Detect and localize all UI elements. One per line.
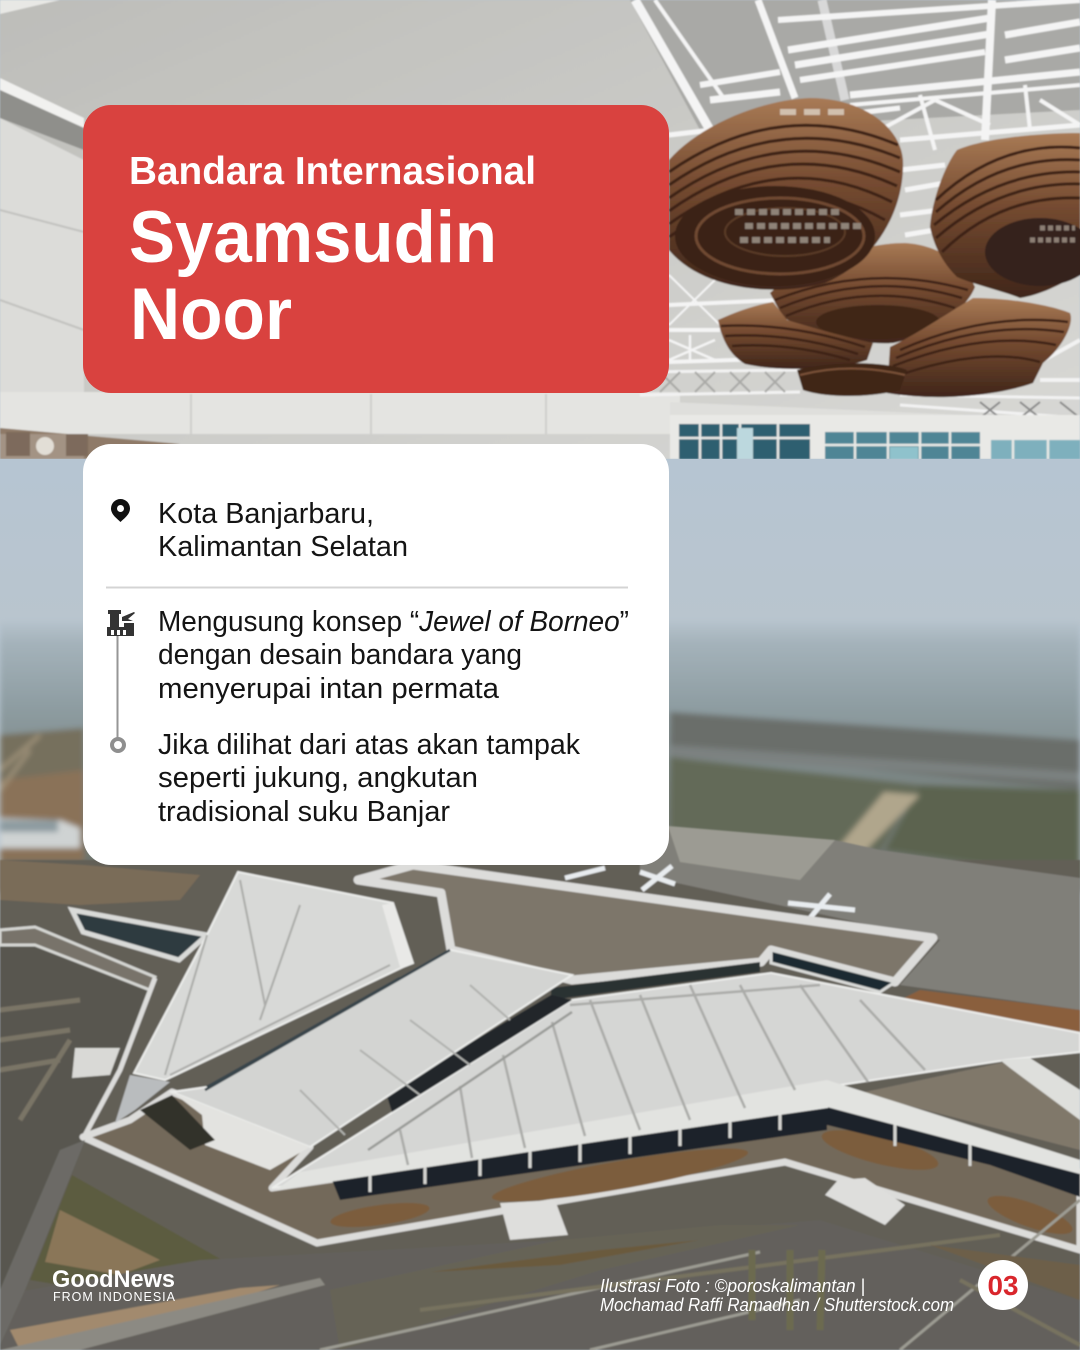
- icon: airport tower and plane: [107, 610, 135, 636]
- sculpture: upper right: [930, 133, 1080, 298]
- apron: [640, 825, 1080, 1010]
- text: jukung comparison: tradisional suku Banjar: [158, 796, 450, 828]
- lattice band under sculptures: [640, 340, 1080, 418]
- sculpture: large upper left: [669, 98, 903, 290]
- dark diagonal gap: [386, 995, 572, 1112]
- heading line: airport label: Bandara Internasional: [129, 150, 536, 193]
- left wing seams: [165, 880, 390, 1075]
- main roof seams: [368, 985, 925, 1165]
- heading: airport name: Syamsudin: [129, 197, 497, 278]
- page number badge: 03: [988, 1270, 1018, 1301]
- photo credit: Ilustrasi Foto : ©poroskalimantan |: [600, 1275, 865, 1296]
- window bands: [330, 1105, 1080, 1200]
- sculpture: lower left: [718, 302, 873, 369]
- road and parking: [0, 1200, 1080, 1350]
- text: jukung comparison: Jika dilihat dari atas akan tampak: [158, 729, 580, 761]
- ceiling on the right behind trusses: [630, 0, 1080, 130]
- text: concept: menyerupai intan permata: [158, 673, 500, 705]
- aircraft: [565, 866, 855, 918]
- heading: airport name: [129, 197, 497, 355]
- sculpture: bottom middle: [797, 363, 907, 396]
- panel: title card: [83, 105, 669, 393]
- main roof: [272, 973, 1080, 1188]
- rattan sculptures: [669, 98, 1080, 397]
- sculpture: lower right: [885, 298, 1071, 397]
- text: location: [158, 498, 408, 563]
- second wing roof: [172, 950, 572, 1147]
- text: concept: [158, 606, 629, 705]
- left wing roof: [134, 872, 413, 1080]
- photo: aerial view of the terminal: [0, 825, 1080, 1350]
- rooftop deck upper: [358, 865, 933, 982]
- photo credit: [600, 1275, 954, 1315]
- text: jukung comparison: [158, 729, 580, 828]
- heading: airport name: Noor: [130, 274, 292, 355]
- text: concept: dengan desain bandara yang: [158, 639, 522, 671]
- panel: information card: [83, 444, 669, 865]
- green landscaped plot: [30, 1175, 240, 1300]
- inner courtyard right: [860, 1062, 1080, 1150]
- left road: [0, 1140, 85, 1345]
- deck stains: [329, 1122, 1076, 1242]
- glass windows: [670, 415, 1080, 459]
- timeline connector: [112, 636, 124, 751]
- canopies: [500, 1178, 905, 1240]
- photo: hazy landscape and runway: [0, 622, 1080, 892]
- text: jukung comparison: seperti jukung, angkutan: [158, 762, 478, 794]
- page number badge: [978, 1260, 1028, 1310]
- icon: location pin: [111, 499, 130, 522]
- text: location: Kalimantan Selatan: [158, 531, 408, 563]
- ground left: [0, 925, 155, 1300]
- left wall panels: [0, 0, 680, 459]
- second wing seams: [205, 950, 450, 1090]
- wall beneath lattice: [670, 402, 1080, 432]
- steel trusses: [635, 0, 1080, 362]
- photo: sky above the airport: [0, 459, 1080, 626]
- text: concept: Mengusung konsep “Jewel of Borneo”: [158, 606, 629, 638]
- text: location: Kota Banjarbaru,: [158, 498, 374, 530]
- lower deck: [83, 1092, 1080, 1250]
- photo: terminal interior ceiling with rattan sculptures: [0, 0, 1080, 459]
- glazed entrance: [115, 1075, 170, 1123]
- photo credit: Mochamad Raffi Ramadhan / Shutterstock.com: [600, 1294, 954, 1315]
- logo: GoodNews from Indonesia: FROM INDONESIA: [53, 1290, 176, 1304]
- sculpture: back middle: [770, 243, 975, 343]
- logo: GoodNews from Indonesia: GoodNews: [52, 1266, 175, 1293]
